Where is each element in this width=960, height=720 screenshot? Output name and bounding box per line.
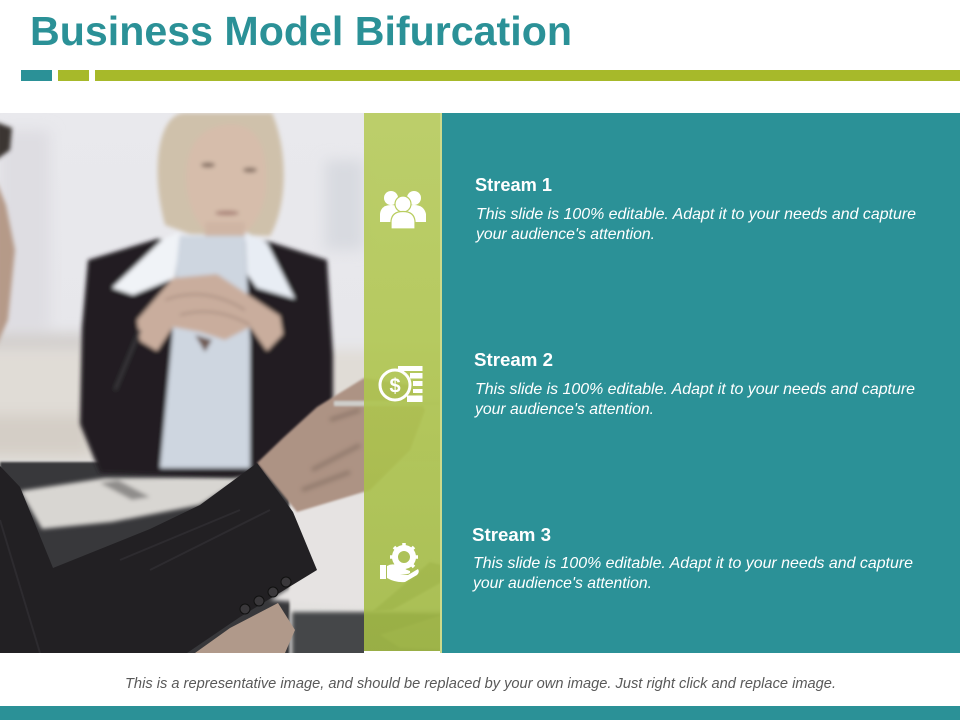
title: Business Model Bifurcation [30,8,572,54]
stream 1 text: This slide is 100% editable. Adapt it to your needs and capture [476,206,916,223]
man's sleeve [0,463,317,653]
stream 1 text: your audience's attention. [475,226,655,243]
stream 1 text: Stream 1 [475,175,552,195]
man's head [0,122,15,347]
icon: people [380,191,426,229]
green icon column [364,113,442,653]
teal content panel [442,113,960,653]
stream 3 text: your audience's attention. [472,575,652,592]
man's hand [257,378,440,512]
stream 3 text: This slide is 100% editable. Adapt it to your needs and capture [473,555,913,572]
stream 3 text [472,525,913,592]
photo: business meeting [0,113,460,660]
icon: hand with gear [380,543,419,582]
title accent bar [21,70,960,81]
icon: coins [380,366,422,402]
stream 3 text: Stream 3 [472,525,551,545]
table [0,460,292,653]
stream 2 text [474,350,915,418]
stream 2 text: Stream 2 [474,350,553,370]
stream 1 text [475,175,916,243]
icon: coins: $ [389,376,401,398]
footer note: This is a representative image, and should be replaced by your own image. Just right click and replace image. [125,676,836,692]
stream 2 text: your audience's attention. [474,401,654,418]
tablet and notebook under overlay [379,564,440,609]
footer bar [0,706,960,720]
woman [80,113,333,477]
stream 2 text: This slide is 100% editable. Adapt it to your needs and capture [475,381,915,398]
